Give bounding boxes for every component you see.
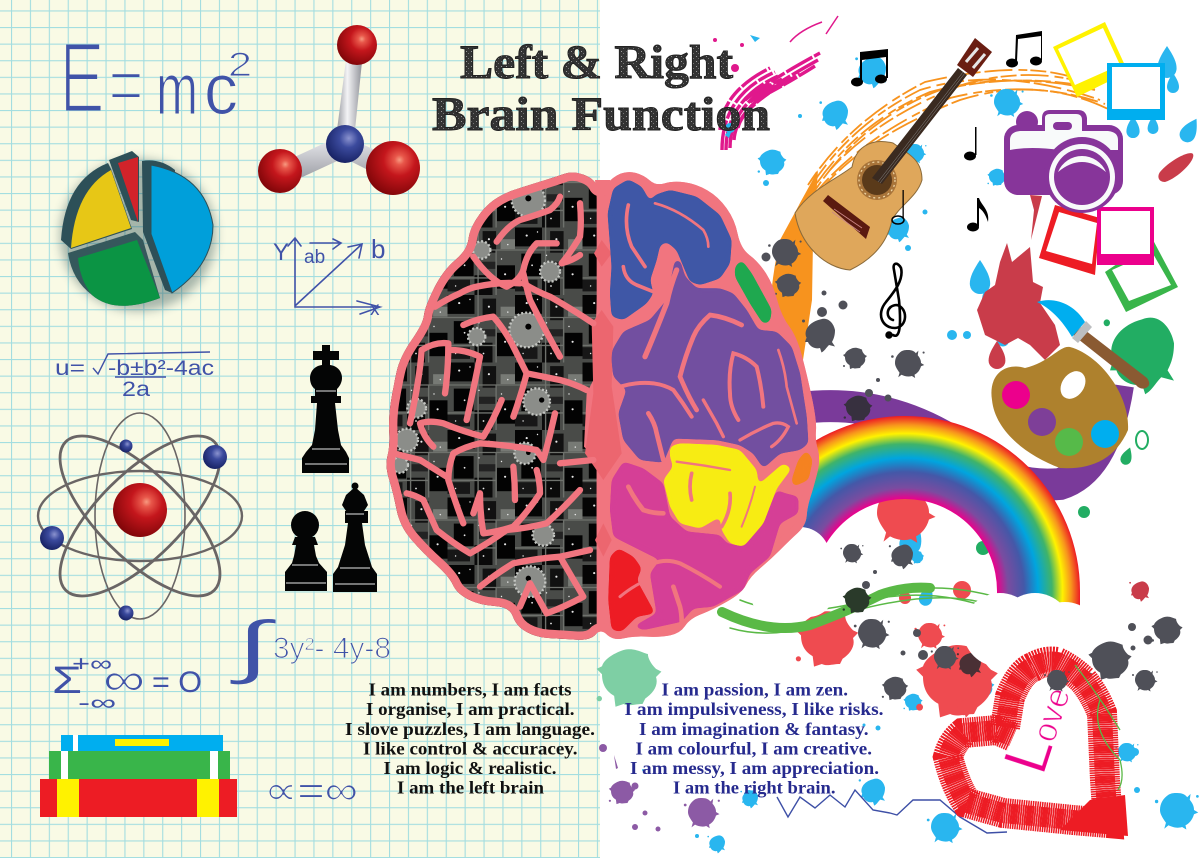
ink splatters: dark grey	[762, 239, 1183, 700]
equation: sigma infinity: Σ	[52, 660, 82, 702]
ink splatters: blue	[642, 35, 1200, 853]
stack of books	[40, 735, 237, 817]
lobe: yellow	[663, 443, 792, 547]
rainbow	[725, 416, 1080, 616]
title: Brain Function	[432, 88, 770, 141]
text block: left brain statements: I am logic & realistic.	[384, 758, 556, 778]
equation: E=mc squared: c	[204, 50, 238, 130]
title: Left & Right	[460, 36, 733, 89]
text block: left brain statements: I organise, I am practical.	[366, 699, 574, 719]
equation: sigma infinity: -∞	[78, 690, 116, 715]
heart with love: Love	[991, 675, 1084, 781]
text block: left brain statements: I am numbers, I am facts	[368, 680, 572, 700]
equation: E=mc squared: E	[59, 22, 105, 134]
vector graph sketch: x	[370, 299, 380, 320]
text block: right brain statements: I am imagination & fantasy.	[639, 719, 868, 739]
equation: sigma infinity: +∞	[72, 651, 112, 676]
lobe: purple parietal	[612, 260, 808, 468]
text block: left brain statements: I slove puzzles, I am language.	[345, 719, 595, 739]
text block: right brain statements: I am the right brain.	[673, 778, 836, 798]
equation: E=mc squared: m	[156, 50, 198, 130]
equation: E=mc squared: 2	[228, 46, 252, 84]
chess piece: pawn	[285, 511, 327, 591]
equation: integral	[229, 607, 391, 685]
vector graph sketch: b	[371, 234, 385, 264]
vector graph sketch: Y	[273, 239, 289, 266]
paintbrush	[1037, 300, 1149, 389]
treble clef	[881, 264, 905, 337]
equation: integral: 3y²- 4y-8	[273, 632, 391, 665]
text block: right brain statements: I am passion, I am zen.	[662, 680, 848, 700]
ink splatter: mint	[597, 649, 661, 707]
equation: quadratic formula	[55, 352, 214, 401]
cloud: left	[751, 527, 835, 619]
lobe: red	[608, 548, 655, 632]
brain: left hemisphere gears texture	[380, 160, 597, 643]
text block: left brain statements	[345, 680, 595, 798]
equation: quadratic formula: u=	[55, 357, 85, 380]
palette	[991, 347, 1128, 468]
polaroid frame: yellow	[1053, 22, 1128, 97]
text block: right brain statements: I am colourful, I am creative.	[636, 738, 872, 758]
text block: right brain statements: I am messy, I am appreciation.	[630, 758, 879, 778]
ink splatter: dark over cloud	[1088, 642, 1132, 680]
equation: quadratic formula: 2a	[122, 378, 150, 401]
brain: left sulci	[393, 197, 593, 613]
text block: left brain statements: I like control & accuracey.	[363, 738, 578, 758]
ink splatters: purple	[599, 744, 720, 832]
brain: silhouette inner band	[387, 172, 819, 640]
polaroid frame: blue	[1107, 63, 1165, 120]
polaroid frame: pink	[1097, 207, 1154, 265]
equation: sigma infinity: ∞	[103, 653, 145, 705]
lobe: green	[735, 260, 772, 324]
chess piece: king	[302, 345, 349, 473]
brain	[380, 160, 819, 643]
equation: E=mc squared	[59, 22, 252, 134]
guitar	[795, 38, 992, 270]
text block: right brain statements: I am impulsiveness, I like risks.	[624, 699, 884, 719]
ink splatters: red	[977, 153, 1193, 602]
paint stroke: orange	[768, 70, 1110, 360]
lobe: blue frontal	[608, 179, 732, 320]
text block: left brain statements: I am the left brain	[397, 778, 544, 798]
brain: right sulci	[620, 203, 797, 622]
paint stroke: green	[722, 588, 1000, 633]
lobe: orange	[792, 450, 813, 487]
brain: midline	[584, 180, 619, 630]
equation: integral: ∫	[229, 607, 277, 685]
brain: midline dark centre	[585, 240, 622, 557]
paint stroke: purple arc	[800, 385, 1118, 485]
camera icon	[1004, 110, 1123, 213]
vector graph sketch: ab	[304, 247, 325, 268]
ink splatters: bright red	[796, 487, 998, 717]
cloud: right	[963, 593, 1100, 680]
music notes	[851, 31, 1042, 232]
chess piece: queen	[333, 482, 377, 592]
title	[432, 36, 770, 141]
equation: sigma infinity: = O	[152, 666, 202, 699]
brain: silhouette	[387, 172, 819, 640]
text block: right brain statements	[624, 680, 884, 798]
pie chart	[60, 151, 216, 311]
equation: E=mc squared: =	[108, 40, 144, 129]
molecule model	[258, 25, 420, 195]
equation: alpha equals infinity: ∝=∞	[264, 769, 358, 813]
heart with love	[948, 662, 1128, 836]
lobe: magenta temporal	[610, 462, 798, 630]
equation: quadratic formula: -b±b²-4ac	[108, 357, 214, 380]
equation: sigma infinity	[52, 651, 202, 715]
ink splatters: green	[976, 318, 1174, 555]
paint stroke: magenta	[713, 16, 838, 150]
polaroid frame: red	[1039, 205, 1100, 275]
background: graph paper left half	[0, 0, 600, 858]
atom diagram	[36, 412, 244, 620]
squiggle line	[777, 790, 1007, 833]
vector graph sketch	[273, 234, 385, 320]
polaroid frame: green	[1105, 240, 1178, 312]
